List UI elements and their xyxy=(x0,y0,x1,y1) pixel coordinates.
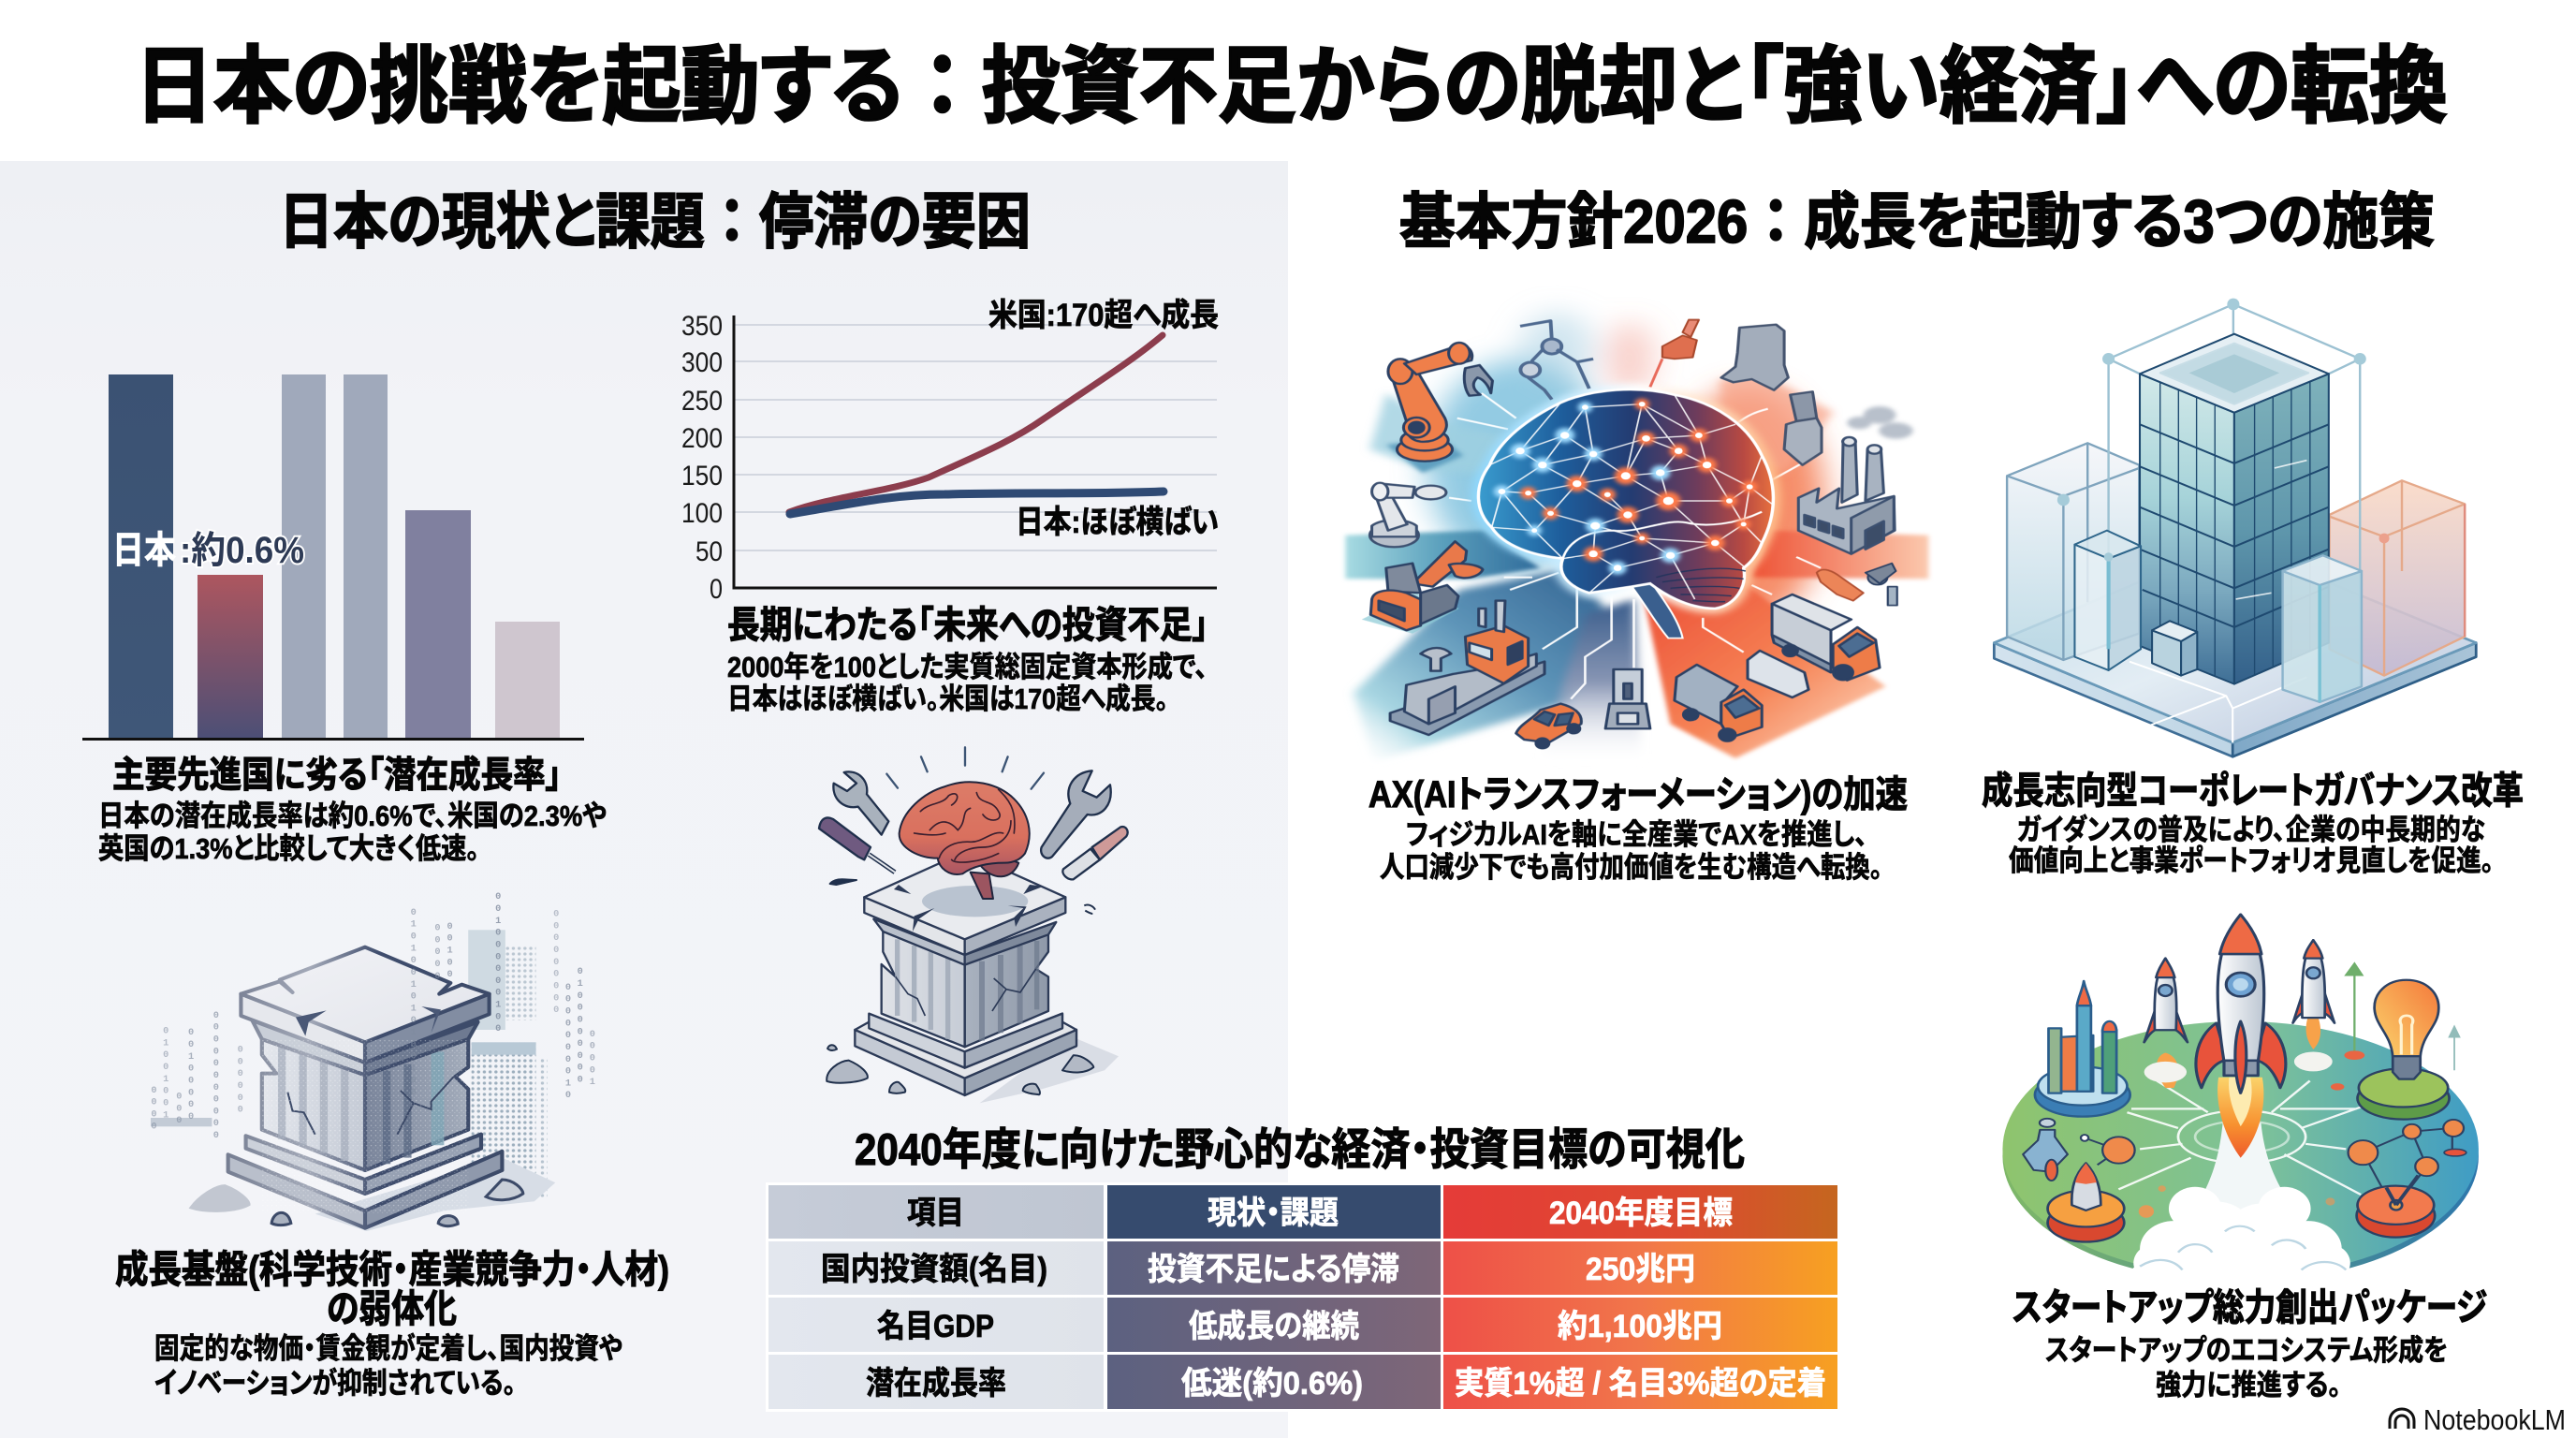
text block: weakened foundation: 成長基盤(科学技術・産業競争力・人材) xyxy=(115,1248,669,1291)
text block: underinvestment: 長期にわたる「未来への投資不足」 xyxy=(727,605,1208,646)
binary digit rain: 000000000 xyxy=(551,910,562,1018)
icon: smoke xyxy=(1847,406,1913,439)
text block: startup package xyxy=(2012,1287,2487,1401)
lower plinth xyxy=(855,1030,1076,1095)
icon: factory xyxy=(1798,437,1895,554)
binary digit rain: 000000 xyxy=(235,1046,245,1118)
heading: left section: 日本の現状と課題：停滞の要因 xyxy=(279,187,1031,256)
line chart: real gross fixed capital formation xyxy=(681,298,1219,605)
text block: startup package: 強力に推進する。 xyxy=(2156,1369,2341,1401)
table row: potential growth: 実質1%超 / 名目3%超の定着 xyxy=(1455,1366,1826,1401)
table header row xyxy=(768,1185,1837,1239)
table row: nominal GDP: 名目GDP xyxy=(877,1309,994,1344)
icon: cargo truck xyxy=(1675,665,1762,741)
table row: nominal GDP: 低成長の継続 xyxy=(1189,1309,1359,1344)
orange disc right xyxy=(2357,1175,2435,1238)
plume and cloud xyxy=(2132,1123,2350,1284)
radial arrows xyxy=(2118,1080,2361,1195)
illustration: AI brain with industry machines xyxy=(1345,312,1928,765)
wrench left xyxy=(833,771,888,835)
molecule left xyxy=(2023,1119,2135,1181)
icon: orange robot arm xyxy=(1388,343,1492,462)
text block: underinvestment xyxy=(727,605,1208,715)
table row: domestic investment: 国内投資額(名目) xyxy=(821,1252,1047,1287)
text block: AX acceleration: フィジカルAIを軸に全産業でAXを推進し、 xyxy=(1406,818,1867,851)
text block: underinvestment: 日本はほぼ横ばい。米国は170超へ成長。 xyxy=(727,682,1168,715)
icon: faded pedestal dissolving into data xyxy=(149,892,597,1231)
small rocket left xyxy=(2144,959,2188,1088)
text block: potential growth xyxy=(98,756,607,865)
small rocket right xyxy=(2293,940,2334,1071)
table row: domestic investment: 投資不足による停滞 xyxy=(1148,1252,1399,1287)
connector lines xyxy=(1449,393,1821,699)
wireframe xyxy=(2109,304,2360,686)
shaft xyxy=(882,932,965,1047)
bar label: Japan: :約0.6% xyxy=(180,530,304,571)
line chart: real gross fixed capital formation: 100 xyxy=(681,498,723,529)
text block: weakened foundation: イノベーションが抑制されている。 xyxy=(154,1367,516,1400)
table row: nominal GDP xyxy=(768,1298,1837,1352)
bar chart: potential growth rate xyxy=(82,374,584,741)
glass box: small front xyxy=(2283,555,2362,702)
glowing dots xyxy=(2139,1185,2334,1218)
table row: domestic investment: 250兆円 xyxy=(1586,1252,1695,1287)
glass cube xyxy=(2152,621,2197,676)
table header row: 現状・課題 xyxy=(1208,1196,1339,1231)
text block: corporate governance: 価値向上と事業ポートフォリオ見直しを促進。 xyxy=(2009,844,2494,877)
text block: weakened foundation: の弱体化 xyxy=(327,1287,457,1330)
text block: AX acceleration: AX(AIトランスフォーメーション)の加速 xyxy=(1368,774,1908,815)
main rocket xyxy=(2196,915,2286,1158)
line chart: real gross fixed capital formation: 350 xyxy=(681,311,723,342)
binary digit rain: 0000 xyxy=(149,1086,159,1134)
title: 日本の挑戦を起動する：投資不足からの脱却と「強い経済」への転換 xyxy=(135,40,2448,134)
binary digit rain: 000 xyxy=(174,1093,184,1128)
binary digit rain: 00100000 xyxy=(185,1028,197,1124)
binary digit rain: 01001001 xyxy=(161,1027,171,1123)
label: Japan line: 日本:ほぼ横ばい xyxy=(1016,505,1219,540)
nodes xyxy=(2057,299,2390,562)
icon: brain on cracked pedestal with tools xyxy=(819,747,1128,1103)
binary digit rain: 0101001010100100 xyxy=(408,908,418,1100)
green arrows xyxy=(2331,963,2459,1091)
text block: corporate governance xyxy=(1982,770,2524,877)
text block: AX acceleration xyxy=(1368,774,1908,884)
sparks xyxy=(886,747,1044,789)
capital xyxy=(873,919,965,965)
table row: potential growth: 低迷(約0.6%) xyxy=(1181,1366,1363,1401)
icon: grey machine top xyxy=(1721,325,1788,390)
heading: right section: 基本方針2026：成長を起動する3つの施策 xyxy=(1399,187,2435,256)
illustration: startup rocket ecosystem xyxy=(2002,915,2479,1284)
illustration: glass buildings governance xyxy=(1994,299,2476,756)
background: left panel xyxy=(0,161,1288,1438)
table header row: 2040年度目標 xyxy=(1549,1196,1733,1231)
text block: weakened foundation: 固定的な物価・賃金観が定着し、国内投資や xyxy=(154,1332,622,1365)
binary digit rain: 00100 xyxy=(445,922,455,982)
icon: grey machine right xyxy=(1784,391,1822,465)
rocks xyxy=(827,879,1095,1094)
line chart: real gross fixed capital formation: 250 xyxy=(681,386,723,417)
wrench right xyxy=(1041,770,1111,858)
table row: potential growth: 潜在成長率 xyxy=(866,1366,1006,1401)
bar city on disc xyxy=(2035,981,2130,1117)
binary digit rain: 0000000010 xyxy=(563,983,574,1103)
line chart: real gross fixed capital formation: 0 xyxy=(710,574,723,605)
icon: van xyxy=(1748,651,1808,697)
binary digit rain: 00001 xyxy=(587,1030,597,1090)
icon: upper grey robot arm xyxy=(1520,321,1593,400)
orange disc left with shuttle xyxy=(2048,1163,2124,1242)
brain xyxy=(900,782,1030,899)
platform disc xyxy=(2002,1021,2479,1283)
line chart: real gross fixed capital formation: 300 xyxy=(681,347,723,378)
icon: machine xyxy=(1605,669,1650,728)
data panel xyxy=(151,930,548,1198)
icon: excavator xyxy=(1362,541,1483,634)
icon: orange gripper top xyxy=(1650,320,1699,387)
label: US line: 米国:170超へ成長 xyxy=(988,298,1219,333)
table row: domestic investment xyxy=(768,1241,1837,1295)
platform xyxy=(1994,543,2476,756)
bar label: Japan: 日本 xyxy=(112,530,176,571)
table row: nominal GDP: 約1,100兆円 xyxy=(1558,1309,1722,1344)
line chart: real gross fixed capital formation: 150 xyxy=(681,461,723,492)
main tower xyxy=(2140,334,2329,684)
screwdriver xyxy=(819,817,871,859)
text block: AX acceleration: 人口減少下でも高付加価値を生む構造へ転換。 xyxy=(1380,851,1882,884)
upper plinth xyxy=(869,1014,1062,1068)
table: 2040 targets xyxy=(766,1182,1840,1412)
binary digit rain: 00000000000 xyxy=(211,1011,221,1143)
icon: big truck xyxy=(1772,594,1880,681)
glass box: small left xyxy=(2074,531,2141,670)
text block: weakened foundation xyxy=(115,1248,669,1400)
text block: corporate governance: ガイダンスの普及により、企業の中長期的な xyxy=(2017,814,2485,846)
icon: car xyxy=(1516,704,1581,748)
colour wash xyxy=(1345,312,1928,765)
binary digit rain: 0100000000 xyxy=(575,967,585,1088)
binary digit rain: 001000000100 xyxy=(493,892,504,1036)
binary digit rain: 00000 xyxy=(432,924,443,984)
lightbulb on disc xyxy=(2358,980,2450,1120)
line chart: real gross fixed capital formation: 50 xyxy=(695,536,723,567)
text block: potential growth: 英国の1.3%と比較して大きく低速。 xyxy=(98,832,479,865)
glass box: orange xyxy=(2330,480,2465,676)
text block: underinvestment: 2000年を100とした実質総固定資本形成で、 xyxy=(727,651,1208,683)
icon: small parts xyxy=(1817,564,1897,606)
binary digit rain xyxy=(149,892,597,1143)
heading: 2040 target table: 2040年度に向けた野心的な経済・投資目標の可視化 xyxy=(855,1124,1745,1174)
brain network xyxy=(1478,389,1774,638)
glass box: left xyxy=(2007,443,2139,660)
bar label: Japan xyxy=(112,530,304,571)
table row: potential growth xyxy=(768,1355,1837,1409)
node network right xyxy=(2349,1120,2466,1205)
brush tool xyxy=(1092,827,1128,859)
icon: factory on conveyor xyxy=(1390,601,1544,735)
table header row: 項目 xyxy=(907,1196,964,1231)
text block: startup package: スタートアップ総力創出パッケージ xyxy=(2012,1287,2487,1328)
line chart: real gross fixed capital formation: 200 xyxy=(681,423,723,454)
icon: white robot arm xyxy=(1369,483,1446,547)
text block: potential growth: 主要先進国に劣る「潜在成長率」 xyxy=(112,756,562,796)
text block: startup package: スタートアップのエコシステム形成を xyxy=(2045,1334,2448,1367)
text block: potential growth: 日本の潜在成長率は約0.6%で、米国の2.3%や xyxy=(98,800,607,832)
